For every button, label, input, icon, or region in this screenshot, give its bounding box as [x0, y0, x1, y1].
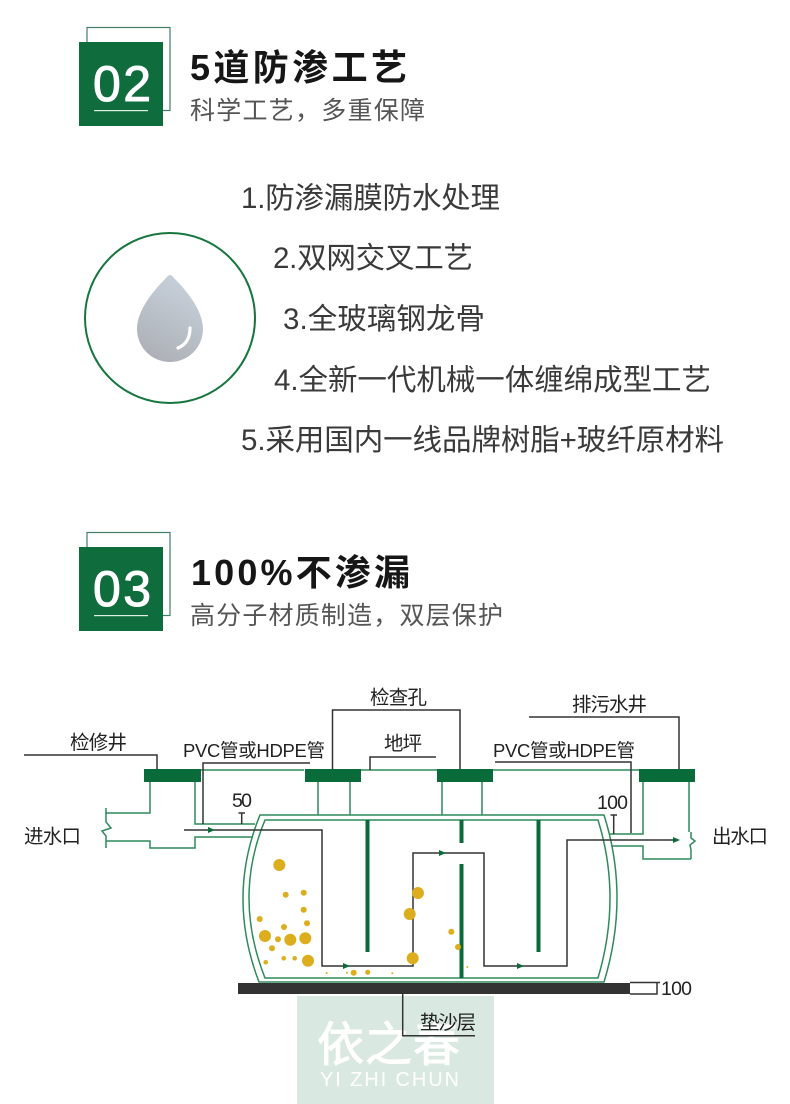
- list item 4: 4.全新一代机械一体缠绵成型工艺: [274, 364, 711, 397]
- label 检修井: [24, 732, 157, 769]
- inspection hole covers: [305, 769, 493, 815]
- icon: water drop in circle: [85, 233, 255, 403]
- sewage well right with outlet: [610, 769, 695, 859]
- label 垫沙层: 垫沙层: [420, 1012, 476, 1034]
- label 检查孔: 检查孔: [370, 687, 427, 709]
- list item 1: 1.防渗漏膜防水处理: [241, 182, 500, 215]
- watermark: [297, 996, 494, 1104]
- label PVC pipe right: [493, 740, 635, 833]
- watermark: YI ZHI CHUN: [320, 1069, 459, 1091]
- dimension 100 at base: 100: [661, 978, 692, 1000]
- inspection well left with inlet: [102, 769, 255, 848]
- badge 02: 02: [93, 56, 151, 112]
- label PVC pipe left: [183, 740, 325, 824]
- label 检修井: 检修井: [70, 732, 127, 754]
- label 地坪: 地坪: [384, 733, 422, 755]
- heading title: 100%不渗漏: [191, 552, 410, 593]
- dimension 100 at base: [630, 978, 692, 1000]
- ground line: [201, 769, 639, 771]
- baffles: [366, 820, 540, 978]
- label 检查孔: [332, 687, 460, 769]
- sediment bubbles: [257, 859, 468, 976]
- heading subtitle: 高分子材质制造，双层保护: [190, 602, 503, 630]
- label PVC pipe left: PVC管或HDPE管: [183, 740, 325, 761]
- septic tank diagram: [24, 687, 768, 1036]
- heading title: 5道防渗工艺: [190, 47, 407, 88]
- label PVC pipe right: PVC管或HDPE管: [493, 740, 635, 761]
- process list: [241, 182, 724, 457]
- watermark: 依之春: [317, 1018, 460, 1071]
- badge 03: [79, 532, 170, 631]
- label 排污水井: [529, 694, 679, 769]
- list item 3: 3.全玻璃钢龙骨: [283, 303, 485, 336]
- dimension 100 outlet: [597, 792, 628, 834]
- badge 02: [79, 28, 170, 126]
- label 垫沙层: [403, 994, 476, 1036]
- list item 5: 5.采用国内一线品牌树脂+玻纤原材料: [241, 424, 724, 457]
- dimension 100 outlet: 100: [597, 792, 628, 814]
- label 排污水井: 排污水井: [572, 694, 647, 716]
- list item 2: 2.双网交叉工艺: [273, 242, 473, 275]
- water flow line with arrows: [184, 827, 680, 969]
- heading subtitle: 科学工艺，多重保障: [190, 97, 425, 125]
- sand base bar: [238, 983, 630, 994]
- label 出水口: 出水口: [712, 826, 768, 848]
- label 进水口: 进水口: [24, 826, 81, 848]
- dimension 50: [232, 790, 252, 824]
- dimension 50: 50: [232, 790, 252, 812]
- section 03 heading: [79, 532, 503, 631]
- label 地坪: [370, 733, 436, 770]
- tank shell: [243, 815, 617, 982]
- badge 03: 03: [93, 561, 151, 617]
- section 02 heading: [79, 28, 425, 126]
